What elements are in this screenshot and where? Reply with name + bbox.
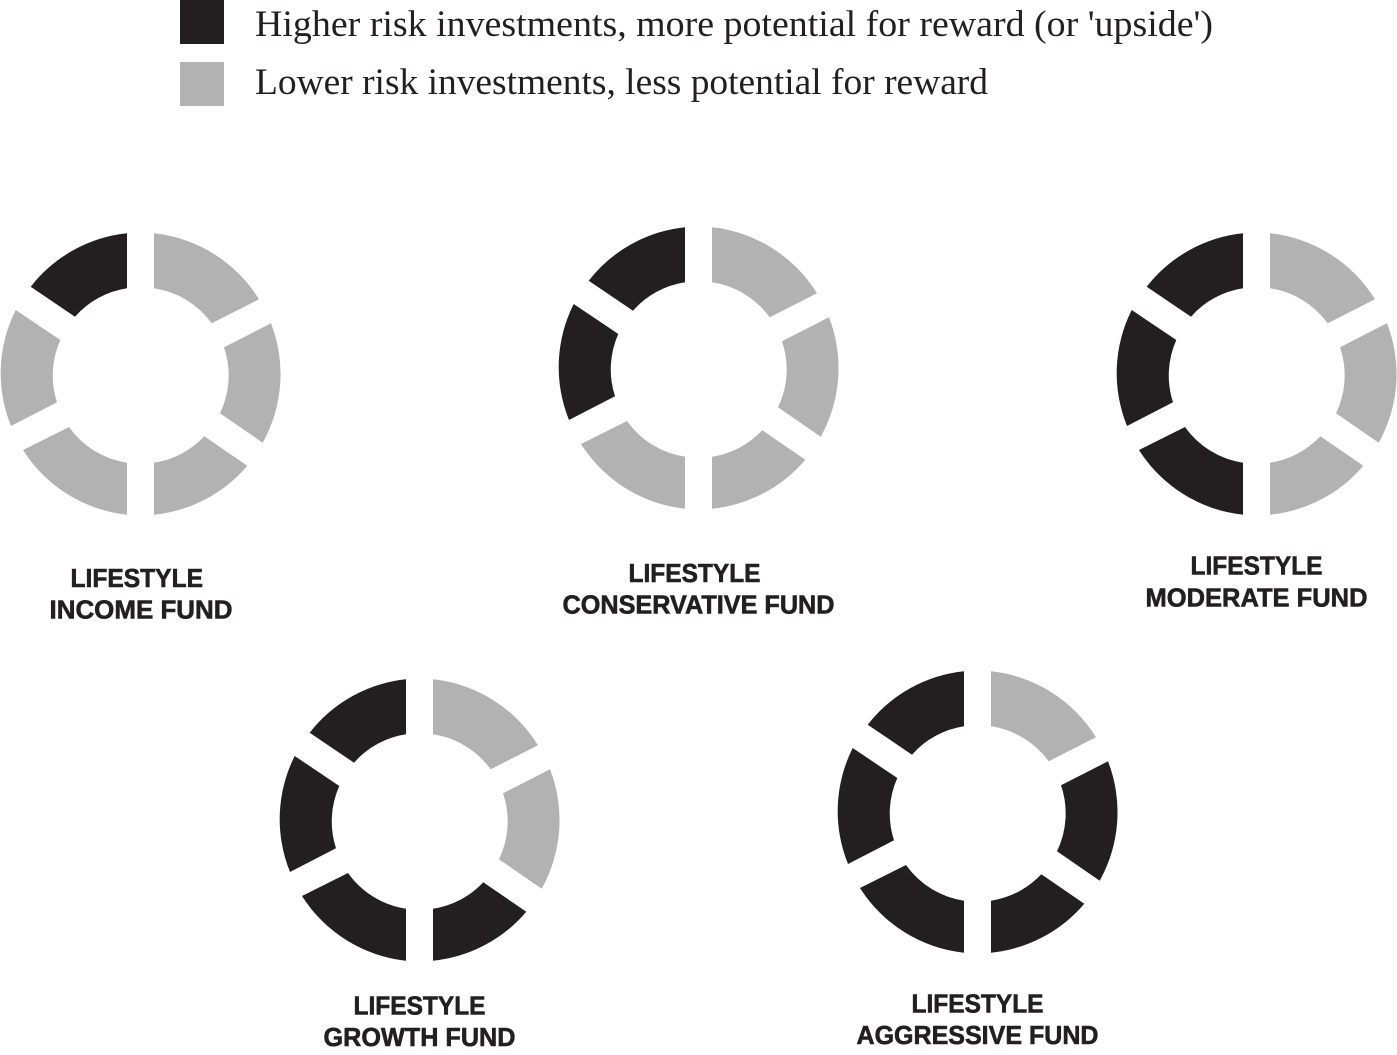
label: growth fund xyxy=(324,990,516,1052)
label: income fund: INCOME FUND xyxy=(50,594,232,624)
label: income fund: LIFESTYLE xyxy=(70,563,203,593)
legend xyxy=(180,0,1213,106)
donut: growth fund, 4 of 6 higher risk xyxy=(280,679,560,961)
label: growth fund: GROWTH FUND xyxy=(324,1022,516,1052)
label: moderate fund xyxy=(1146,550,1368,612)
label: moderate fund: MODERATE FUND xyxy=(1146,582,1368,612)
legend text: lower risk: Lower risk investments, less potential for reward xyxy=(255,62,988,103)
label: conservative fund xyxy=(562,558,834,620)
legend swatch: lower risk xyxy=(180,62,224,106)
donut: moderate fund, 3 of 6 higher risk xyxy=(1117,233,1397,515)
label: aggressive fund xyxy=(856,988,1098,1050)
donut: income fund, 1 of 6 higher risk xyxy=(1,233,281,515)
label: growth fund: LIFESTYLE xyxy=(354,990,486,1020)
legend swatch: higher risk xyxy=(180,0,224,44)
donut: conservative fund, 2 of 6 higher risk xyxy=(559,227,839,509)
label: moderate fund: LIFESTYLE xyxy=(1190,550,1322,580)
label: income fund xyxy=(50,563,232,624)
legend text: higher risk: Higher risk investments, more potential for reward (or 'upside') xyxy=(255,4,1213,45)
label: aggressive fund: LIFESTYLE xyxy=(912,988,1044,1018)
label: aggressive fund: AGGRESSIVE FUND xyxy=(856,1020,1098,1050)
label: conservative fund: CONSERVATIVE FUND xyxy=(562,590,834,620)
donut: aggressive fund, 5 of 6 higher risk xyxy=(838,671,1118,953)
label: conservative fund: LIFESTYLE xyxy=(628,558,760,588)
